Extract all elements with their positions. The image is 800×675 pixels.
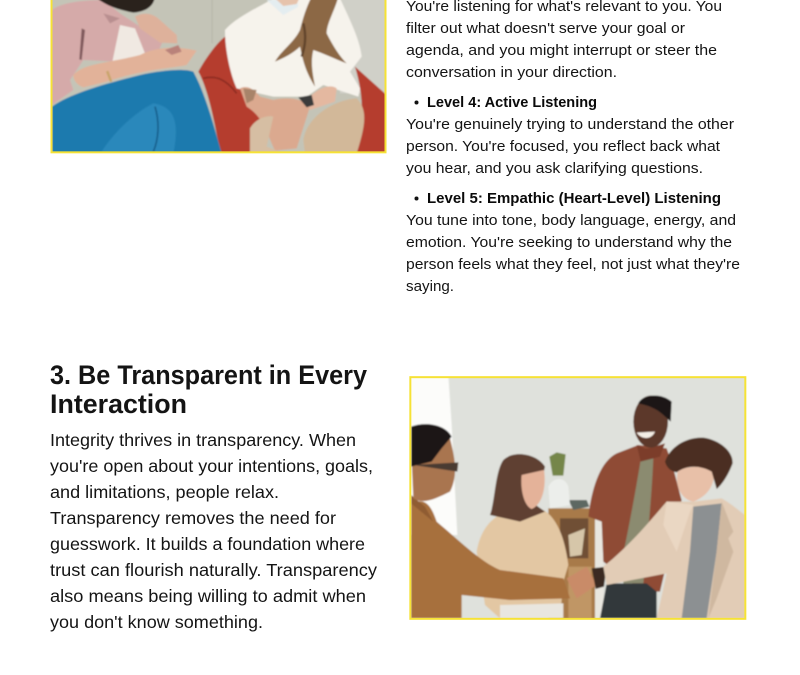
heading: section 3: Interaction (50, 389, 187, 419)
photo: two women seated talking on a red bean bag (50, 0, 387, 153)
Level 3 description: agenda, and you might interrupt or steer the (406, 42, 717, 59)
Level 4 description (406, 116, 734, 177)
body text: transparency paragraph (50, 430, 377, 632)
Level 4 description: You're genuinely trying to understand the other (406, 116, 734, 133)
body text: transparency paragraph: and limitations, people relax. (50, 482, 279, 502)
Level 3 description (406, 0, 722, 81)
Level 3 description: conversation in your direction. (406, 64, 617, 81)
photo border (51, 0, 385, 152)
photo: four colleagues shaking hands (410, 375, 747, 620)
Level 5 description: You tune into tone, body language, energy, and (406, 212, 736, 229)
body text: transparency paragraph: guesswork. It builds a foundation where (50, 534, 365, 554)
body text: transparency paragraph: trust can flourish naturally. Transparency (50, 560, 377, 580)
Level 4 description: person. You're focused, you reflect back what (406, 138, 721, 155)
Level 5 description (406, 212, 740, 295)
heading: section 3: 3. Be Transparent in Every (50, 360, 367, 390)
Level 5 description: person feels what they feel, not just what they're (406, 256, 740, 273)
bullet: Level 5 heading: Level 5: Empathic (Heart-Level) Listening (427, 190, 721, 207)
body text: transparency paragraph: you don't know something. (50, 612, 263, 632)
Level 4 description: you hear, and you ask clarifying questions. (406, 160, 703, 177)
right column: listening levels text (406, 0, 740, 295)
Level 3 description: filter out what doesn't serve your goal or (406, 20, 685, 37)
Level 5 description: emotion. You're seeking to understand why the (406, 234, 732, 251)
body text: transparency paragraph: also means being willing to admit when (50, 586, 366, 606)
body text: transparency paragraph: you're open about your intentions, goals, (50, 456, 373, 476)
body text: transparency paragraph: Transparency removes the need for (50, 508, 336, 528)
body text: transparency paragraph: Integrity thrives in transparency. When (50, 430, 356, 450)
Level 5 description: saying. (406, 278, 454, 295)
photo border (410, 377, 745, 619)
heading: section 3 (50, 360, 367, 419)
bullet: Level 4 heading: Level 4: Active Listening (427, 94, 597, 111)
